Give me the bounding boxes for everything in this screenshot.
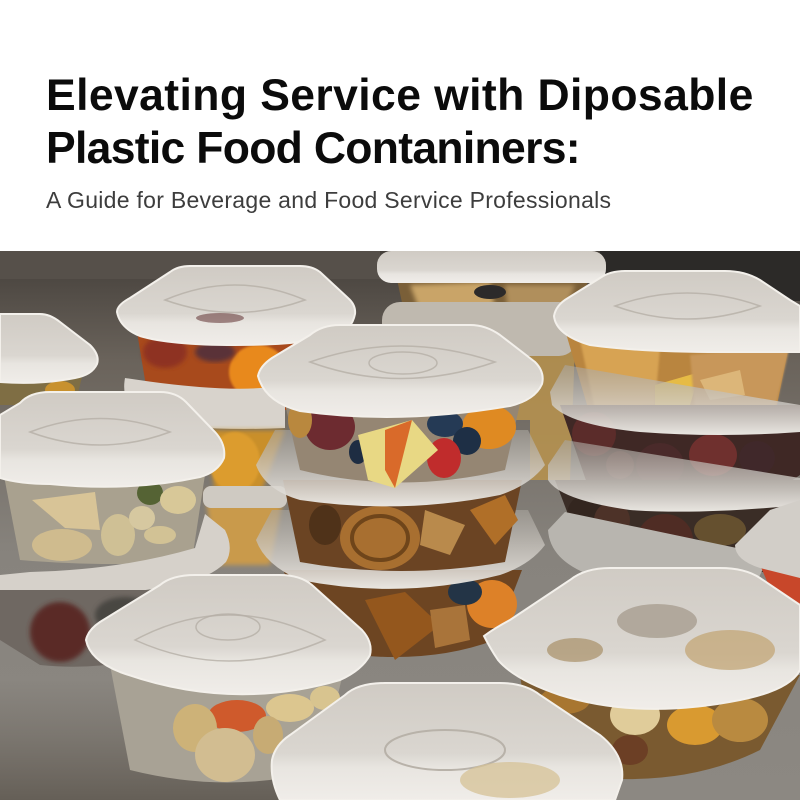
container: front centre bbox=[272, 683, 622, 800]
title: Elevating Service with Diposable bbox=[46, 71, 754, 120]
container: right back top bbox=[554, 271, 800, 415]
middle box bbox=[283, 480, 522, 571]
container: left stack bbox=[0, 392, 230, 667]
background: kitchen and steel counter bbox=[0, 251, 800, 800]
subtitle: A Guide for Beverage and Food Service Professionals bbox=[46, 187, 611, 213]
container: front left bbox=[86, 575, 371, 782]
title: Plastic Food Contaniners: bbox=[46, 124, 580, 173]
container: centre stack bbox=[256, 325, 545, 660]
container: far left partial bbox=[0, 314, 98, 405]
container: back left stack bbox=[117, 266, 355, 565]
container: far right partial bbox=[735, 500, 800, 612]
container: right middle bbox=[548, 365, 800, 586]
title bbox=[46, 71, 754, 173]
container: front right bbox=[484, 568, 800, 779]
top box bbox=[283, 395, 522, 482]
container: back centre bbox=[377, 251, 606, 480]
bottom box bbox=[283, 570, 522, 657]
photo: stacked plastic food containers on a steel counter bbox=[0, 251, 800, 800]
